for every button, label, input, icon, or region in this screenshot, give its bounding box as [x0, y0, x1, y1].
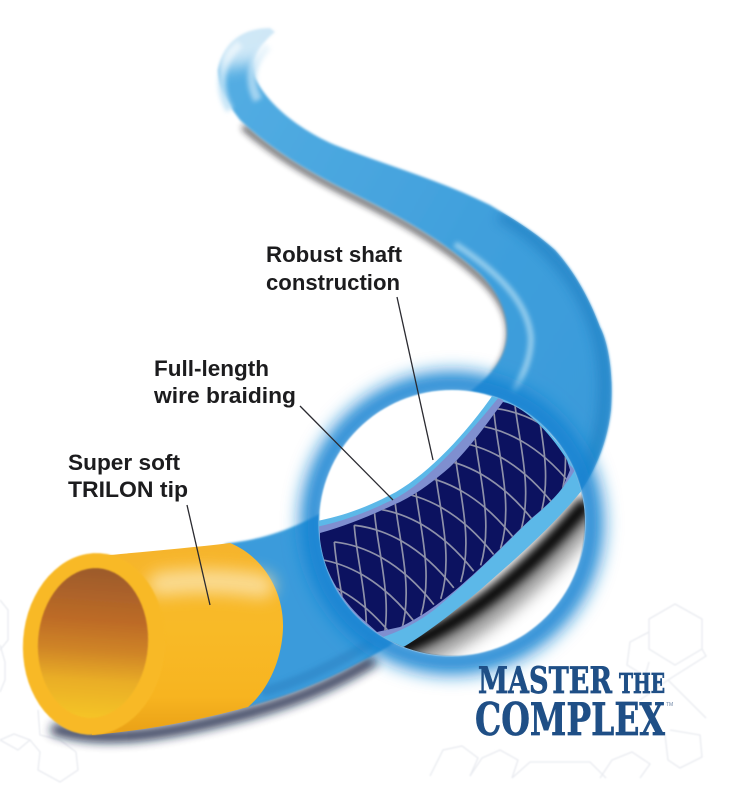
lens glow: [313, 384, 591, 662]
highlight left of hook: [222, 44, 240, 110]
logo: master the complex: TM: [666, 702, 673, 708]
tip body: [92, 543, 283, 735]
lower shaft shadow: [52, 659, 375, 736]
lens cutaway: [319, 396, 585, 656]
magnifier lens: [286, 356, 618, 690]
tip highlight: [160, 581, 262, 586]
logo: master the complex: COMPLEX: [475, 693, 665, 746]
soft shadow below shaft: [398, 508, 592, 660]
shaft outer dark edge: [500, 215, 605, 540]
periwinkle layer: [316, 397, 575, 638]
tip end rim: [17, 548, 171, 740]
yellow TRILON tip: [17, 543, 283, 740]
label: robust shaft construction: Robust shaft: [266, 242, 403, 267]
shaft shading: [500, 215, 605, 540]
lens white interior: [319, 390, 585, 656]
highlight at bend: [455, 244, 531, 392]
highlight inner hook: [252, 46, 268, 100]
navy core: [320, 402, 570, 632]
label: robust shaft construction: construction: [266, 270, 400, 295]
logo: master the complex: [475, 660, 673, 746]
catheter tube: [52, 5, 612, 736]
wire braid: [324, 406, 566, 630]
leader lines: [187, 297, 433, 605]
label: super soft TRILON tip: TRILON tip: [68, 477, 188, 502]
logo: master the complex: MASTER: [478, 660, 613, 702]
lower shaft shading: [262, 642, 372, 692]
label: full-length wire braiding: wire braiding: [153, 383, 296, 408]
logo: master the complex: THE: [619, 669, 665, 700]
shaft body: [218, 28, 612, 708]
label: super soft TRILON tip: Super soft: [68, 450, 181, 475]
shadow under upper shaft: [245, 128, 510, 374]
outer clear layer: [319, 396, 581, 647]
tip bore: [33, 564, 153, 722]
hexagon background pattern: [0, 600, 706, 782]
tip fade: [205, 5, 325, 70]
lower shaft re-fill: [225, 512, 390, 708]
label: full-length wire braiding: Full-length: [154, 356, 269, 381]
core shadow below shaft: [392, 502, 587, 652]
